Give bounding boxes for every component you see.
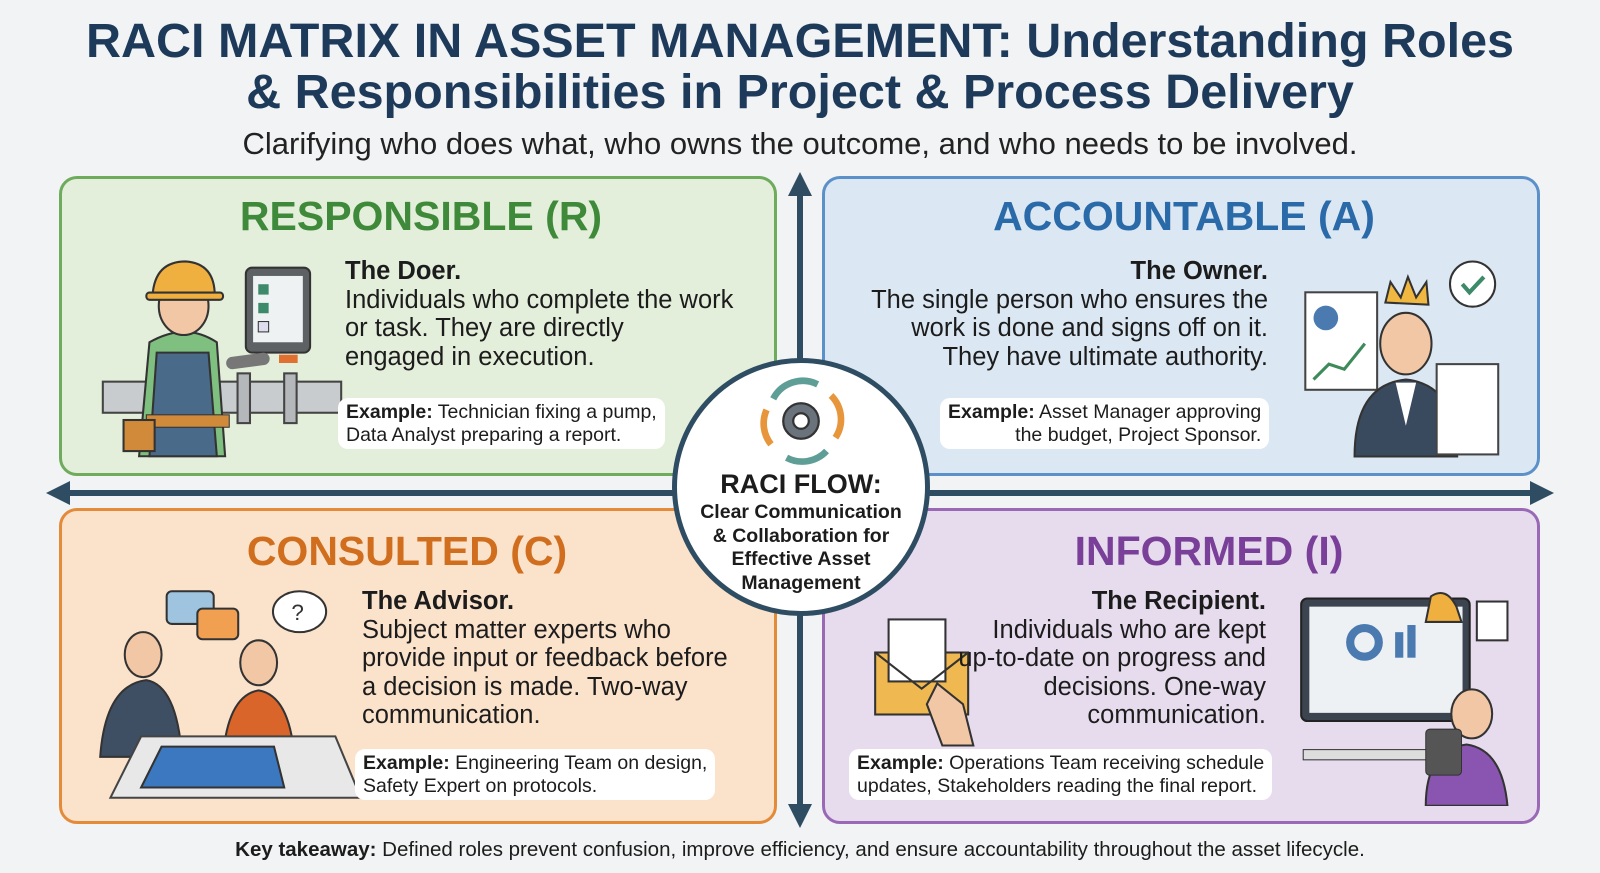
text: the doer xyxy=(345,257,734,371)
title: RACI MATRIX IN ASSET MANAGEMENT: Understanding Roles xyxy=(86,14,1514,68)
text: the recipient: The Recipient. xyxy=(1092,587,1266,615)
example: Data Analyst preparing a report. xyxy=(346,424,621,446)
text: the recipient: Individuals who are kept xyxy=(992,616,1266,644)
illustration: technician xyxy=(102,260,342,458)
panel: informed xyxy=(822,508,1540,824)
heading: accountable: ACCOUNTABLE (A) xyxy=(993,193,1375,239)
text: the owner: They have ultimate authority. xyxy=(942,343,1268,371)
illustration: advisors xyxy=(99,590,360,799)
illustration: manager with crown xyxy=(1304,260,1500,458)
example: updates, Stakeholders reading the final report. xyxy=(857,774,1257,796)
heading: informed: INFORMED (I) xyxy=(1075,528,1343,574)
text: the doer: The Doer. xyxy=(345,257,461,285)
text: the advisor: Subject matter experts who xyxy=(362,616,671,644)
illustration: envelope xyxy=(874,618,975,746)
text: the owner: work is done and signs off on it. xyxy=(911,314,1268,342)
example: Example: Asset Manager approving xyxy=(948,401,1261,423)
center circle: raci flow: Effective Asset xyxy=(731,548,871,570)
center circle: raci flow: Clear Communication xyxy=(700,501,902,523)
text: the advisor: communication. xyxy=(362,701,541,729)
text: the advisor: a decision is made. Two-way xyxy=(362,673,688,701)
example: the budget, Project Sponsor. xyxy=(1015,424,1261,446)
text: the doer: or task. They are directly xyxy=(345,314,624,342)
example xyxy=(355,749,715,800)
text: the advisor xyxy=(362,587,728,729)
text: the recipient: up-to-date on progress and xyxy=(958,644,1266,672)
heading: responsible: RESPONSIBLE (R) xyxy=(240,193,602,239)
center circle: raci flow: Management xyxy=(741,572,861,594)
text: the advisor: provide input or feedback before xyxy=(362,644,728,672)
panel: accountable xyxy=(822,176,1540,476)
example: Example: Operations Team receiving schedule xyxy=(857,752,1264,774)
example xyxy=(940,398,1269,449)
example: Example: Technician fixing a pump, xyxy=(346,401,657,423)
title xyxy=(86,14,1514,119)
text: the recipient: decisions. One-way xyxy=(1043,673,1266,701)
center circle: raci flow: & Collaboration for xyxy=(713,524,889,546)
text: raci flow: RACI FLOW: xyxy=(720,469,882,499)
text: the owner xyxy=(871,257,1268,371)
example: Safety Expert on protocols. xyxy=(363,774,597,796)
text: the recipient: communication. xyxy=(1087,701,1266,729)
panel: responsible xyxy=(59,176,777,476)
title: & Responsibilities in Project & Process Delivery xyxy=(246,65,1354,119)
text: the doer: Individuals who complete the work xyxy=(345,286,733,314)
text: the advisor: The Advisor. xyxy=(362,587,514,615)
panel: consulted xyxy=(59,508,777,824)
example xyxy=(338,398,665,449)
text: the owner: The single person who ensures the xyxy=(871,286,1268,314)
example: Example: Engineering Team on design, xyxy=(363,752,707,774)
icon: gear with cycle arrows xyxy=(760,377,844,465)
text: the doer: engaged in execution. xyxy=(345,343,595,371)
illustration: monitor user xyxy=(1300,592,1508,806)
subtitle: Clarifying who does what, who owns the outcome, and who needs to be involved. xyxy=(243,126,1357,161)
illustration: advisors: ? xyxy=(291,600,304,625)
heading: consulted: CONSULTED (C) xyxy=(247,528,567,574)
center circle: raci flow xyxy=(672,358,930,616)
footer: key takeaway: Key takeaway: Defined roles prevent confusion, improve efficiency, and ensure accountability throughout the asset lifecycle. xyxy=(235,838,1365,861)
example xyxy=(849,749,1272,800)
text: the owner: The Owner. xyxy=(1131,257,1268,285)
text: the recipient xyxy=(958,587,1266,729)
